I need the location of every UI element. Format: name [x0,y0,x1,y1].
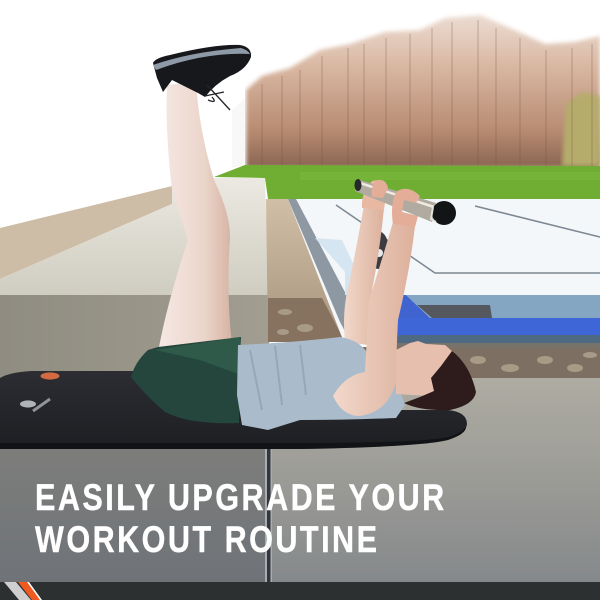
legs [159,82,232,347]
white wall edge [0,0,245,228]
mat eyelet [40,372,60,380]
near hand [392,189,420,227]
green shorts [131,337,241,423]
dark footer bar [0,582,600,600]
near arm [333,222,415,416]
far hand fingers [372,180,388,198]
shoe [153,45,251,110]
ground slabs in foreground [0,378,600,583]
head and face [396,341,476,410]
sport court surface [288,199,600,348]
massage ball [367,231,389,269]
barbell [354,179,456,225]
heading line two: WORKOUT ROUTINE [35,519,379,560]
heading line one: EASILY UPGRADE YOUR [35,477,447,518]
far arm [344,205,384,345]
gravel strip and path, left [0,186,172,279]
exercise mat [0,371,467,449]
tree line [246,15,600,168]
mat logo [20,399,50,411]
footer stripes logo [4,582,42,600]
far palm [362,180,387,210]
lower concrete slab [0,295,269,378]
grass lawn [214,165,600,199]
grey tank top [237,337,405,430]
sky and white wall [0,0,600,240]
stone bed [266,199,345,342]
